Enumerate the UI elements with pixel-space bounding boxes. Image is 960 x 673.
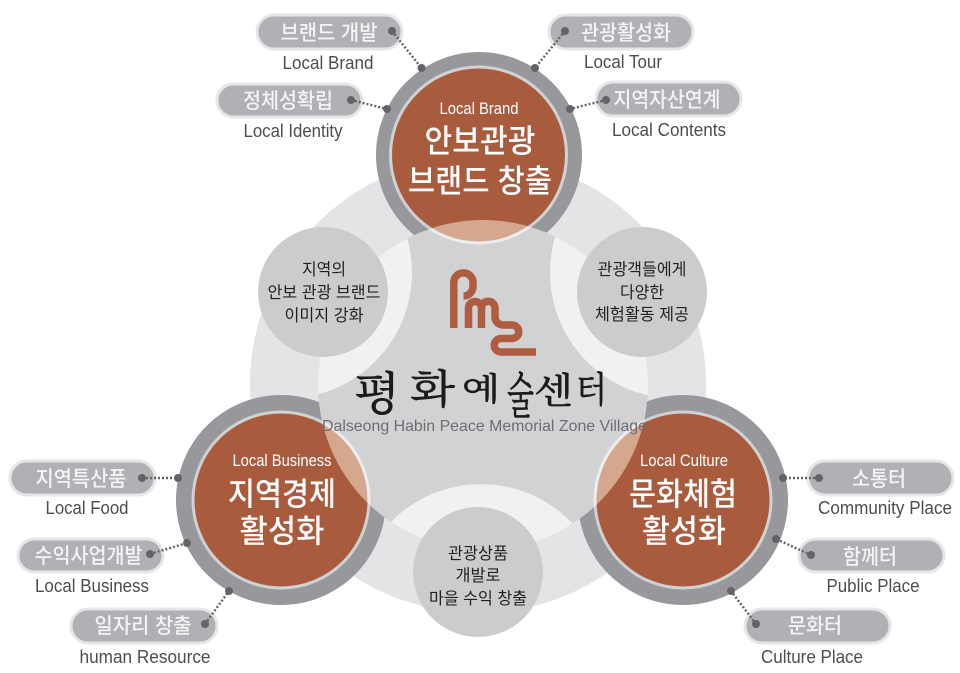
background circle <box>250 157 706 613</box>
left circle text: Local Business <box>232 451 332 470</box>
connecting necks <box>160 146 802 640</box>
top circle text: 브랜드 창출 <box>408 163 552 199</box>
small circle: right: 관광객들에게 <box>598 260 686 279</box>
calligraphy title: 터 <box>576 362 607 413</box>
icon: PMZ logo <box>454 273 536 352</box>
small circle: left <box>258 227 388 357</box>
callout: tourism activation: 관광활성화 <box>581 22 671 45</box>
callout: brand development: Local Brand <box>282 53 374 73</box>
callout: culture place: Culture Place <box>761 647 863 667</box>
small circle: bottom: 마을 수익 창출 <box>429 589 527 608</box>
callout: human resource: 일자리 창출 <box>94 615 192 638</box>
callout: tourism activation: Local Tour <box>584 52 662 72</box>
small circle: bottom: 관광상품 <box>448 544 508 563</box>
callout: culture place <box>727 587 890 667</box>
callout: local business <box>18 539 191 596</box>
right circle text: 활성화 <box>642 513 726 549</box>
callout: identity: Local Identity <box>244 121 342 141</box>
small circle: right: 다양한 <box>620 283 664 302</box>
callout: community place <box>779 461 953 518</box>
small circle: bottom <box>413 507 543 637</box>
callout: brand development: 브랜드 개발 <box>280 22 378 45</box>
calligraphy title <box>354 356 607 428</box>
callout: local food: 지역특산품 <box>36 468 126 491</box>
callout: human resource: human Resource <box>80 647 210 667</box>
calligraphy title: 평 <box>354 358 400 424</box>
right circle text: Local Culture <box>640 451 728 470</box>
top circle text: 안보관광 <box>424 123 536 159</box>
callout: public place: Public Place <box>826 576 920 596</box>
callout: human resource <box>71 587 233 667</box>
callout: tourism activation <box>531 15 693 72</box>
calligraphy title: 센 <box>534 363 573 414</box>
callout: local food: Local Food <box>46 498 128 518</box>
right circle text: 문화체험 <box>629 476 737 512</box>
callout: local business: 수익사업개발 <box>34 545 142 568</box>
small circle: bottom: 개발로 <box>456 566 500 585</box>
callout: contents: 지역자산연계 <box>614 89 720 112</box>
callout: community place: Community Place <box>818 498 952 518</box>
calligraphy title: 화 <box>410 358 455 415</box>
callout: contents: Local Contents <box>612 120 726 140</box>
calligraphy title: 술 <box>507 356 534 428</box>
callout: local business: Local Business <box>35 576 149 596</box>
callout: community place: 소통터 <box>852 468 906 491</box>
left circle text <box>228 451 336 549</box>
callout: brand development <box>257 15 426 73</box>
small circle: right <box>577 227 707 357</box>
small circle: left: 이미지 강화 <box>284 306 364 325</box>
left circle text: 지역경제 <box>228 476 336 512</box>
small circle: right: 체험활동 제공 <box>595 305 689 324</box>
callout: contents <box>566 82 741 140</box>
calligraphy title: 예 <box>462 364 500 410</box>
subtitle: Dalseong Habin Peace Memorial Zone Village <box>322 418 647 435</box>
right circle text <box>629 451 737 549</box>
callout: public place: 함께터 <box>843 546 897 569</box>
callout: identity: 정체성확립 <box>243 90 333 113</box>
top circle text <box>408 99 552 199</box>
small circle: left: 지역의 <box>302 260 346 279</box>
small circle: left: 안보 관광 브랜드 <box>268 283 380 302</box>
outer rings <box>176 52 788 605</box>
callout: public place <box>772 535 944 596</box>
left circle text: 활성화 <box>240 513 324 549</box>
red circles <box>193 67 771 588</box>
top circle text: Local Brand <box>440 99 518 118</box>
callout: local food <box>10 461 182 518</box>
callout: culture place: 문화터 <box>788 615 842 638</box>
central circle <box>318 227 648 541</box>
callout: identity <box>217 84 391 141</box>
